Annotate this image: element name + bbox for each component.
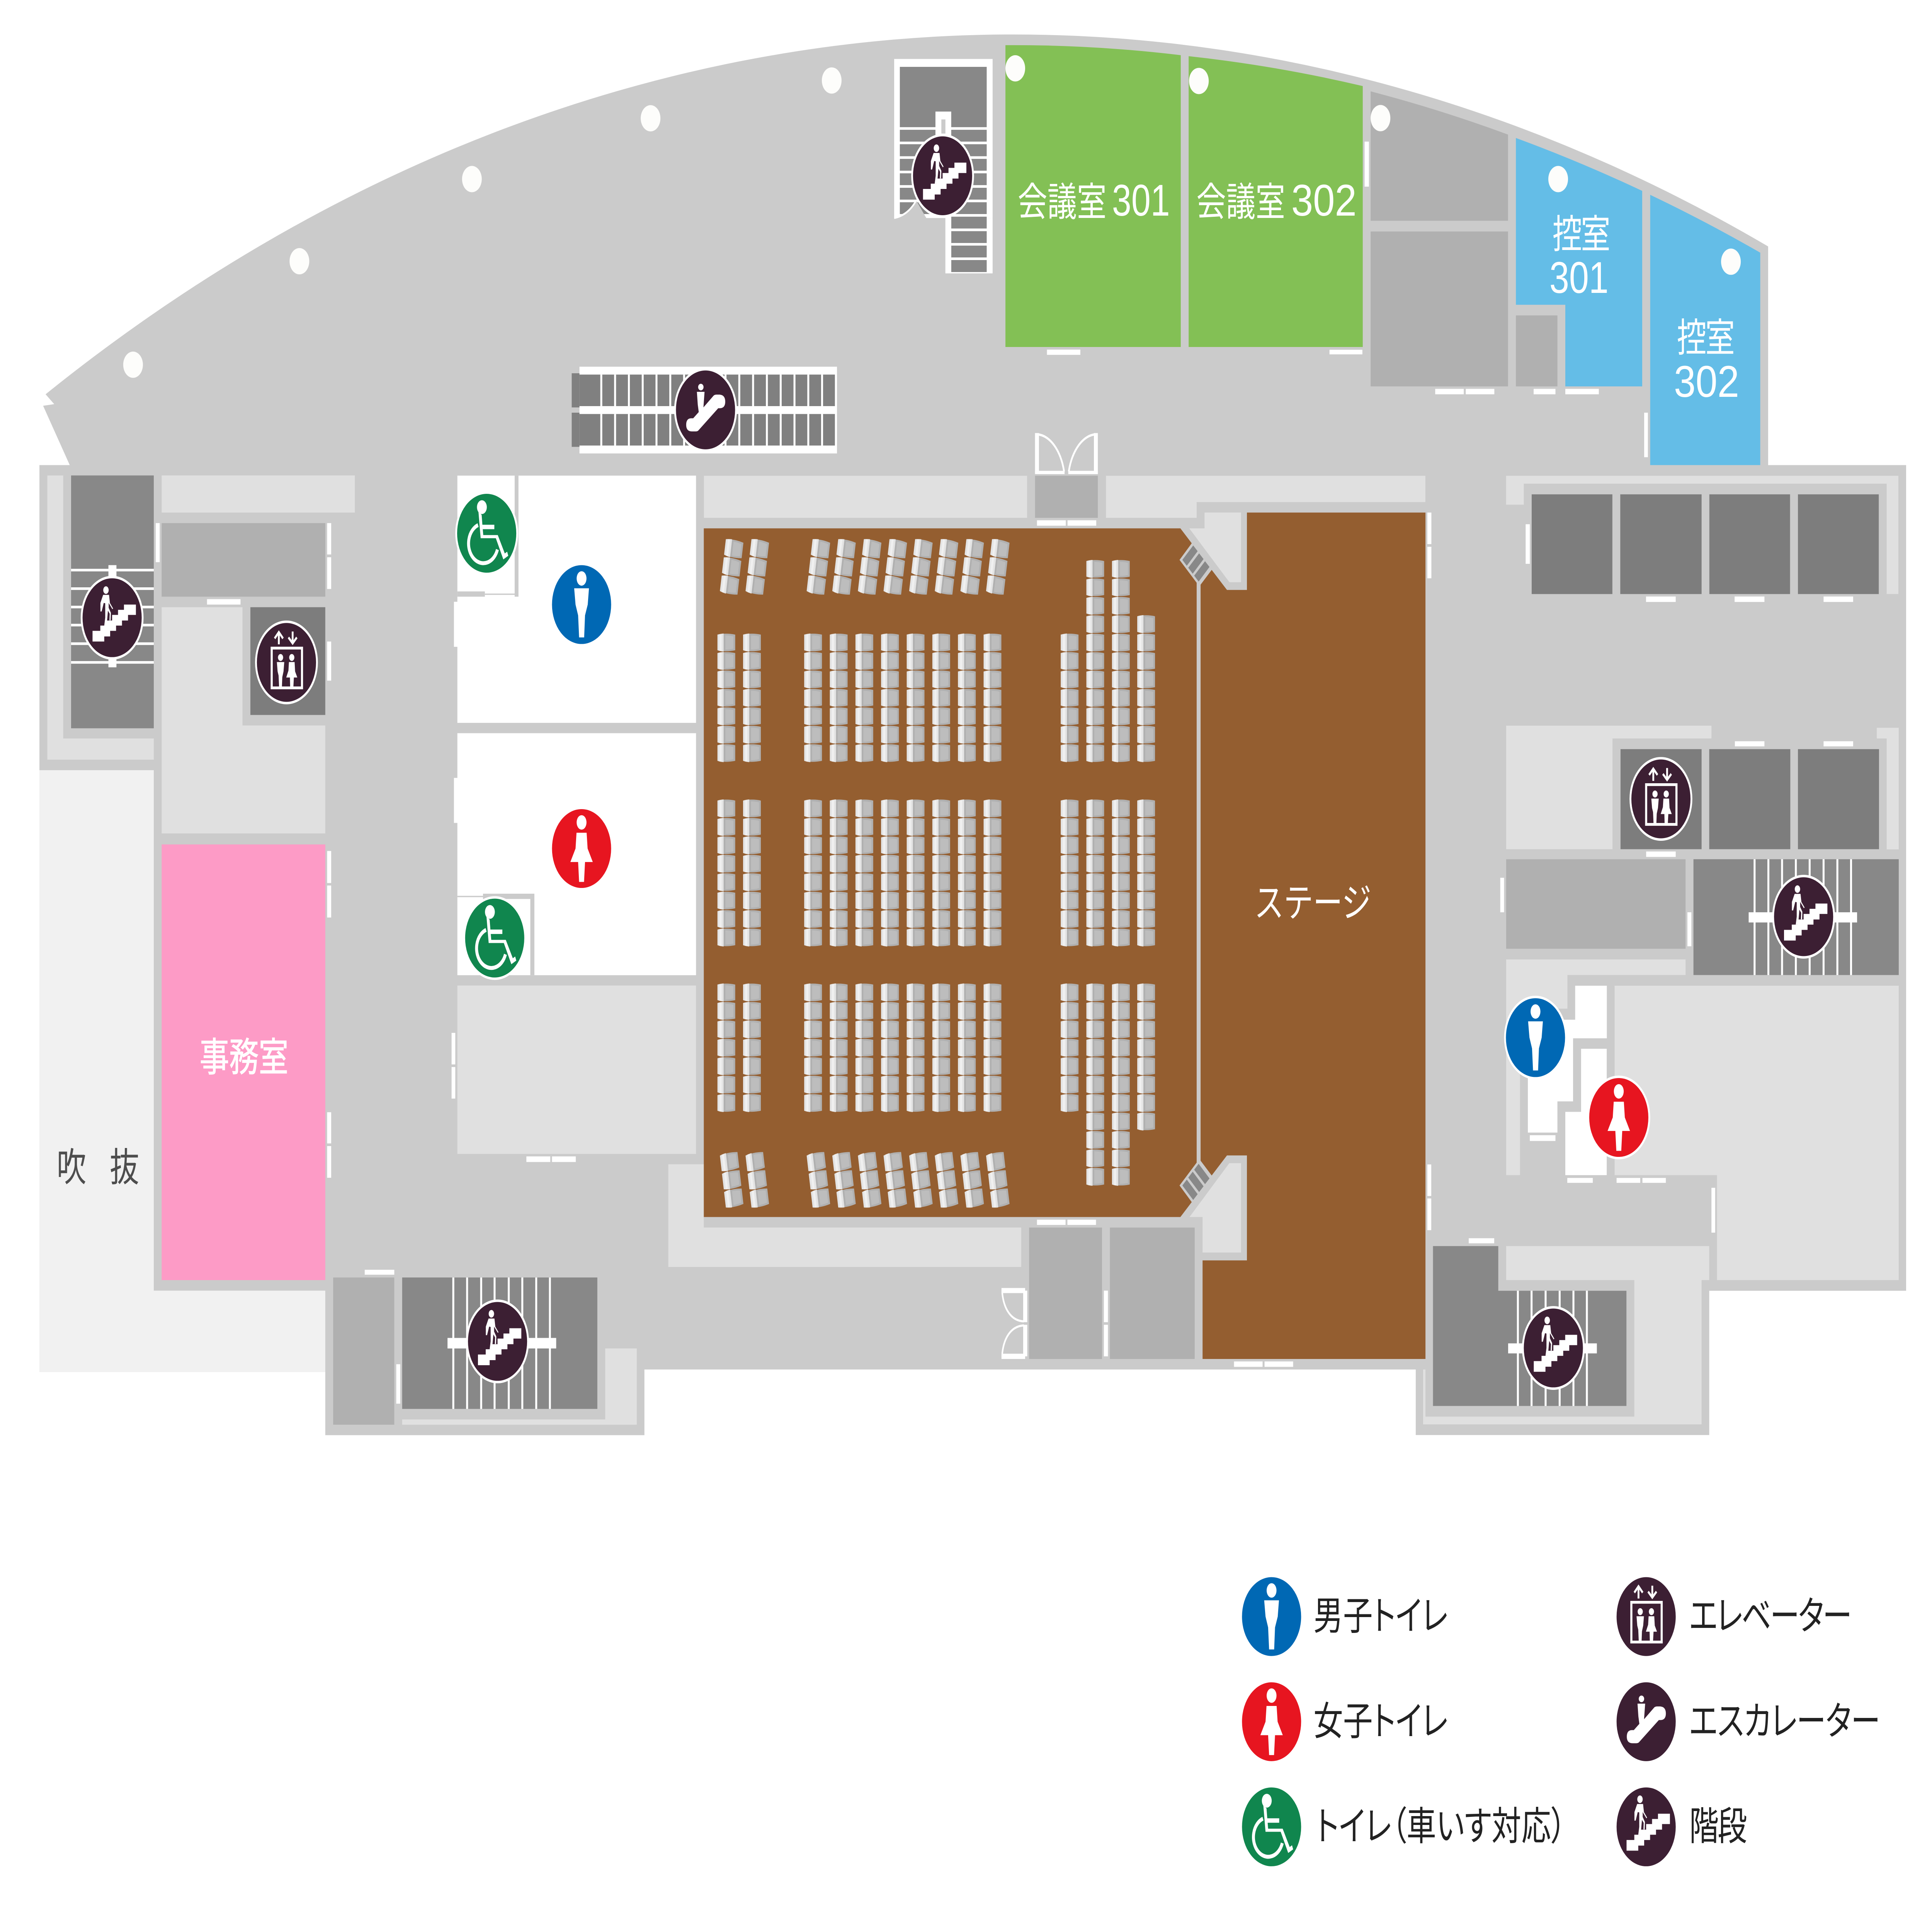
label: 会議室301 xyxy=(1018,175,1170,225)
label: 会議室302 xyxy=(1196,175,1357,225)
seat block: rear angled row xyxy=(720,1151,1010,1209)
icon: stairs east xyxy=(1772,875,1835,959)
legend item: accessible toilet: トイレ（車いす対応） xyxy=(1316,1804,1566,1849)
seat block: first rows xyxy=(718,560,1155,762)
legend item: women's toilet xyxy=(1242,1682,1448,1761)
escalator xyxy=(572,367,837,453)
legend item: elevator: エレベーター xyxy=(1689,1594,1852,1638)
icon: elevator west xyxy=(255,621,318,704)
legend item: stairs xyxy=(1617,1787,1747,1866)
building floor outline xyxy=(39,34,1906,1435)
icon: stairs south-east xyxy=(1522,1306,1585,1390)
icon: men's toilet east xyxy=(1504,996,1567,1080)
atrium 吹抜 xyxy=(39,770,325,1372)
label: 吹抜: 吹 抜 xyxy=(57,1146,139,1190)
panel: waiting room 302 xyxy=(1650,195,1760,465)
label: 控室301: 控室 xyxy=(1553,213,1611,257)
panel: dark shaft rooms xyxy=(250,494,1879,849)
seat block: middle rows xyxy=(718,799,1155,947)
legend item: stairs: 階段 xyxy=(1689,1804,1747,1849)
panel: meeting room 301 xyxy=(1005,45,1181,347)
panel: light back-of-house rooms xyxy=(47,475,1899,1425)
perimeter pillars xyxy=(123,55,1741,378)
label: 控室302: 控室 xyxy=(1677,316,1735,360)
icon: stairs west xyxy=(81,576,143,660)
label: 会議室301: 会議室 xyxy=(1018,180,1107,224)
double door: south hall entrance xyxy=(1002,1288,1027,1359)
stairs: south-west xyxy=(402,1277,597,1409)
label: 控室302 xyxy=(1674,316,1739,406)
stage label: ステージ xyxy=(1254,881,1371,925)
icon: elevator east xyxy=(1629,757,1692,841)
icon: wheelchair toilet south xyxy=(463,896,526,980)
icon: men's toilet central xyxy=(552,565,611,644)
icon: stairs north xyxy=(911,134,974,218)
stage side wings xyxy=(1189,513,1241,1252)
legend item: escalator xyxy=(1617,1682,1880,1761)
legend item: elevator xyxy=(1617,1577,1852,1656)
stairs: south-east xyxy=(1433,1246,1626,1406)
panel: hall floor with seats xyxy=(704,528,1197,1217)
panel: women's restroom xyxy=(454,733,696,975)
stairs: north xyxy=(894,59,993,273)
label: 控室301: 301 xyxy=(1549,253,1609,303)
doors xyxy=(156,141,1853,1404)
floor plan base xyxy=(39,34,1906,1435)
legend xyxy=(1242,1577,1880,1866)
office label: 事務室 xyxy=(200,1036,288,1080)
panel: east restrooms xyxy=(1528,986,1607,1175)
panel: upper service rooms xyxy=(1371,91,1558,386)
panel: medium grey rooms xyxy=(162,476,1685,1425)
label: 会議室301: 301 xyxy=(1112,175,1170,225)
legend item: men's toilet xyxy=(1242,1577,1448,1656)
legend item: accessible toilet xyxy=(1242,1787,1566,1866)
stairs: west xyxy=(71,475,154,728)
panel: stage xyxy=(1201,513,1425,1359)
panel: meeting room 302 xyxy=(1189,56,1363,347)
label: 会議室302: 会議室 xyxy=(1196,180,1285,224)
double door: north hall entrance xyxy=(1035,433,1098,474)
seat block: front angled row xyxy=(720,538,1010,596)
panel: office 事務室 xyxy=(162,844,325,1280)
panel: men's restroom xyxy=(454,476,696,723)
panel: waiting room 301 xyxy=(1516,138,1642,386)
icon: wheelchair toilet north xyxy=(455,492,518,575)
icon: women's toilet east xyxy=(1587,1076,1650,1159)
label: 控室301 xyxy=(1549,213,1611,303)
stairs: east xyxy=(1694,859,1899,975)
stage steps xyxy=(1182,546,1209,1200)
icon: women's toilet central xyxy=(552,809,611,888)
seat block: rear rows xyxy=(718,983,1155,1186)
legend item: escalator: エスカレーター xyxy=(1689,1699,1880,1743)
icon: escalator xyxy=(674,368,737,452)
icon: stairs south-west xyxy=(466,1299,529,1383)
label: 控室302: 302 xyxy=(1674,357,1739,406)
legend item: men's toilet: 男子トイレ xyxy=(1313,1594,1448,1638)
label: 会議室302: 302 xyxy=(1291,175,1357,225)
legend item: women's toilet: 女子トイレ xyxy=(1313,1699,1448,1743)
